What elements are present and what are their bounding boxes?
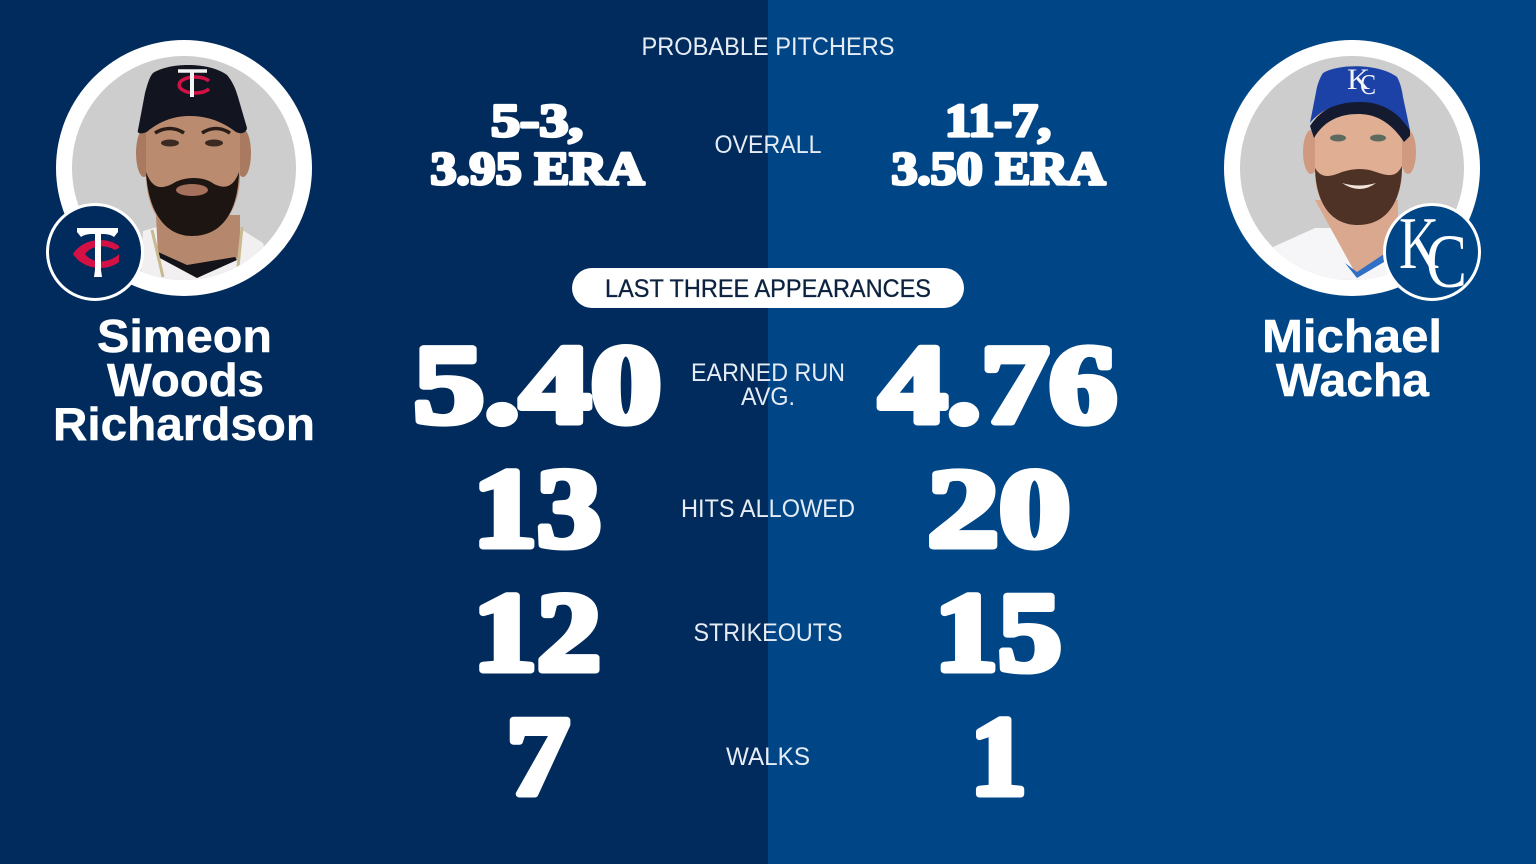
- stat row: walks: [506, 695, 1026, 819]
- stat: overall record left: 5-3,: [491, 95, 583, 147]
- stat row: earned run average: AVG.: [741, 383, 795, 411]
- player photo: Michael Wacha: [1224, 40, 1480, 300]
- stat: overall record left: [430, 95, 645, 195]
- stat row: hits allowed: 20: [928, 447, 1070, 571]
- stat row: hits allowed: HITS ALLOWED: [681, 495, 855, 523]
- icon: KC cap logo: C: [1360, 70, 1376, 101]
- player name: Simeon Woods Richardson: Woods: [107, 354, 264, 406]
- heading pill: last three appearances: LAST THREE APPEARANCES: [605, 275, 931, 303]
- logo: Twins: [48, 204, 142, 300]
- player name: Michael Wacha: Michael: [1262, 310, 1442, 362]
- player name: Simeon Woods Richardson: Simeon: [97, 310, 272, 362]
- icon: KC cap logo: [1348, 70, 1375, 94]
- stat row: earned run average: 4.76: [879, 323, 1117, 447]
- heading: probable pitchers: PROBABLE PITCHERS: [642, 33, 894, 61]
- panel: right background: [768, 0, 1536, 864]
- stat: overall record right: [892, 95, 1106, 195]
- player name: Michael Wacha: [1262, 310, 1442, 406]
- player name: Michael Wacha: Wacha: [1276, 354, 1429, 406]
- stat: overall record right: 11-7,: [945, 95, 1051, 147]
- stat row: earned run average: EARNED RUN: [691, 359, 845, 387]
- stat row: earned run average: [414, 323, 1117, 447]
- stat row: earned run average: 5.40: [414, 323, 662, 447]
- heading pill: last three appearances: [572, 268, 964, 308]
- player photo: Simeon Woods Richardson: [56, 40, 312, 300]
- logo: Royals: [1384, 203, 1480, 304]
- panel: left background: [0, 0, 768, 864]
- stat row: walks: 1: [970, 695, 1026, 819]
- stat row: strikeouts: STRIKEOUTS: [694, 619, 842, 647]
- label: overall: OVERALL: [714, 131, 822, 159]
- stat row: strikeouts: [473, 571, 1062, 695]
- stat row: strikeouts: 15: [934, 571, 1062, 695]
- logo: Royals: K: [1399, 203, 1439, 285]
- player name: Simeon Woods Richardson: [53, 310, 315, 450]
- stat row: hits allowed: [473, 447, 1070, 571]
- stat row: hits allowed: 13: [473, 447, 601, 571]
- icon: KC cap logo: K: [1347, 63, 1370, 96]
- logo: Royals: C: [1426, 220, 1467, 304]
- stat row: walks: WALKS: [726, 743, 810, 771]
- stat: overall record left: 3.95 ERA: [430, 143, 645, 195]
- stat row: walks: 7: [506, 695, 570, 819]
- player name: Simeon Woods Richardson: Richardson: [53, 398, 315, 450]
- stat: overall record right: 3.50 ERA: [892, 143, 1106, 195]
- stat row: strikeouts: 12: [473, 571, 601, 695]
